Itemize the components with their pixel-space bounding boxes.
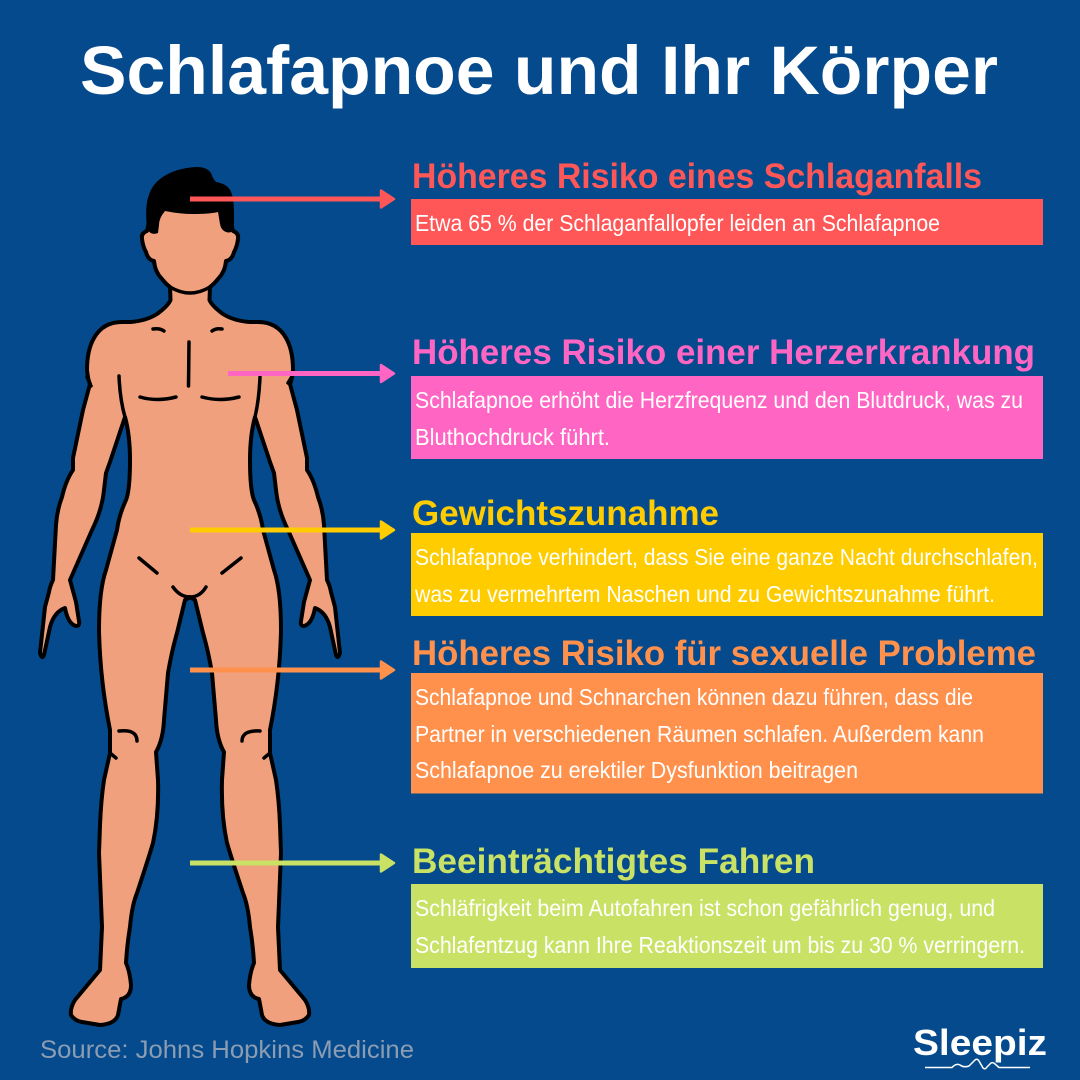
source note: Source: Johns Hopkins Medicine xyxy=(40,1036,414,1064)
panel: stroke: Etwa 65 % der Schlaganfallopfer leiden an Schlafapnoe xyxy=(415,210,940,236)
panel: sexual problems: Schlafapnoe zu erektiler Dysfunktion beitragen xyxy=(415,757,858,783)
heading: weight gain: Gewichtszunahme xyxy=(412,494,719,533)
panel: driving: Schläfrigkeit beim Autofahren ist schon gefährlich genug, und xyxy=(415,895,995,921)
heading: heart disease: Höheres Risiko einer Herzerkrankung xyxy=(412,333,1035,372)
logo: Sleepiz: Sleepiz xyxy=(913,1022,1047,1063)
arrow: heart xyxy=(228,365,394,382)
heading: stroke: Höheres Risiko eines Schlaganfalls xyxy=(412,157,982,196)
arrow: stroke xyxy=(190,190,394,208)
heading: sexual problems: Höheres Risiko für sexuelle Probleme xyxy=(412,634,1036,673)
arrow: sexual problems xyxy=(190,662,394,678)
panel: driving xyxy=(411,884,1043,968)
heading: driving: Beeinträchtigtes Fahren xyxy=(412,842,815,881)
panel: heart disease xyxy=(411,376,1043,459)
arrow: weight xyxy=(190,522,394,538)
panel: sexual problems: Schlafapnoe und Schnarchen können dazu führen, dass die xyxy=(415,684,973,710)
panel: stroke xyxy=(411,199,1043,245)
title: Schlafapnoe und Ihr Körper xyxy=(80,32,998,109)
icon: hair xyxy=(146,167,234,234)
panel: driving: Schlafentzug kann Ihre Reaktionszeit um bis zu 30 % verringern. xyxy=(415,932,1025,958)
panel: weight gain: was zu vermehrtem Naschen und zu Gewichtszunahme führt. xyxy=(414,581,995,607)
arrow: driving xyxy=(190,854,394,872)
panel: sexual problems xyxy=(411,673,1043,794)
panel: heart disease: Bluthochdruck führt. xyxy=(415,424,610,450)
panel: heart disease: Schlafapnoe erhöht die Herzfrequenz und den Blutdruck, was zu xyxy=(415,387,1023,413)
illustration: human body xyxy=(40,167,340,1025)
panel: weight gain xyxy=(411,533,1043,616)
panel: sexual problems: Partner in verschiedenen Räumen schlafen. Außerdem kann xyxy=(415,721,984,747)
